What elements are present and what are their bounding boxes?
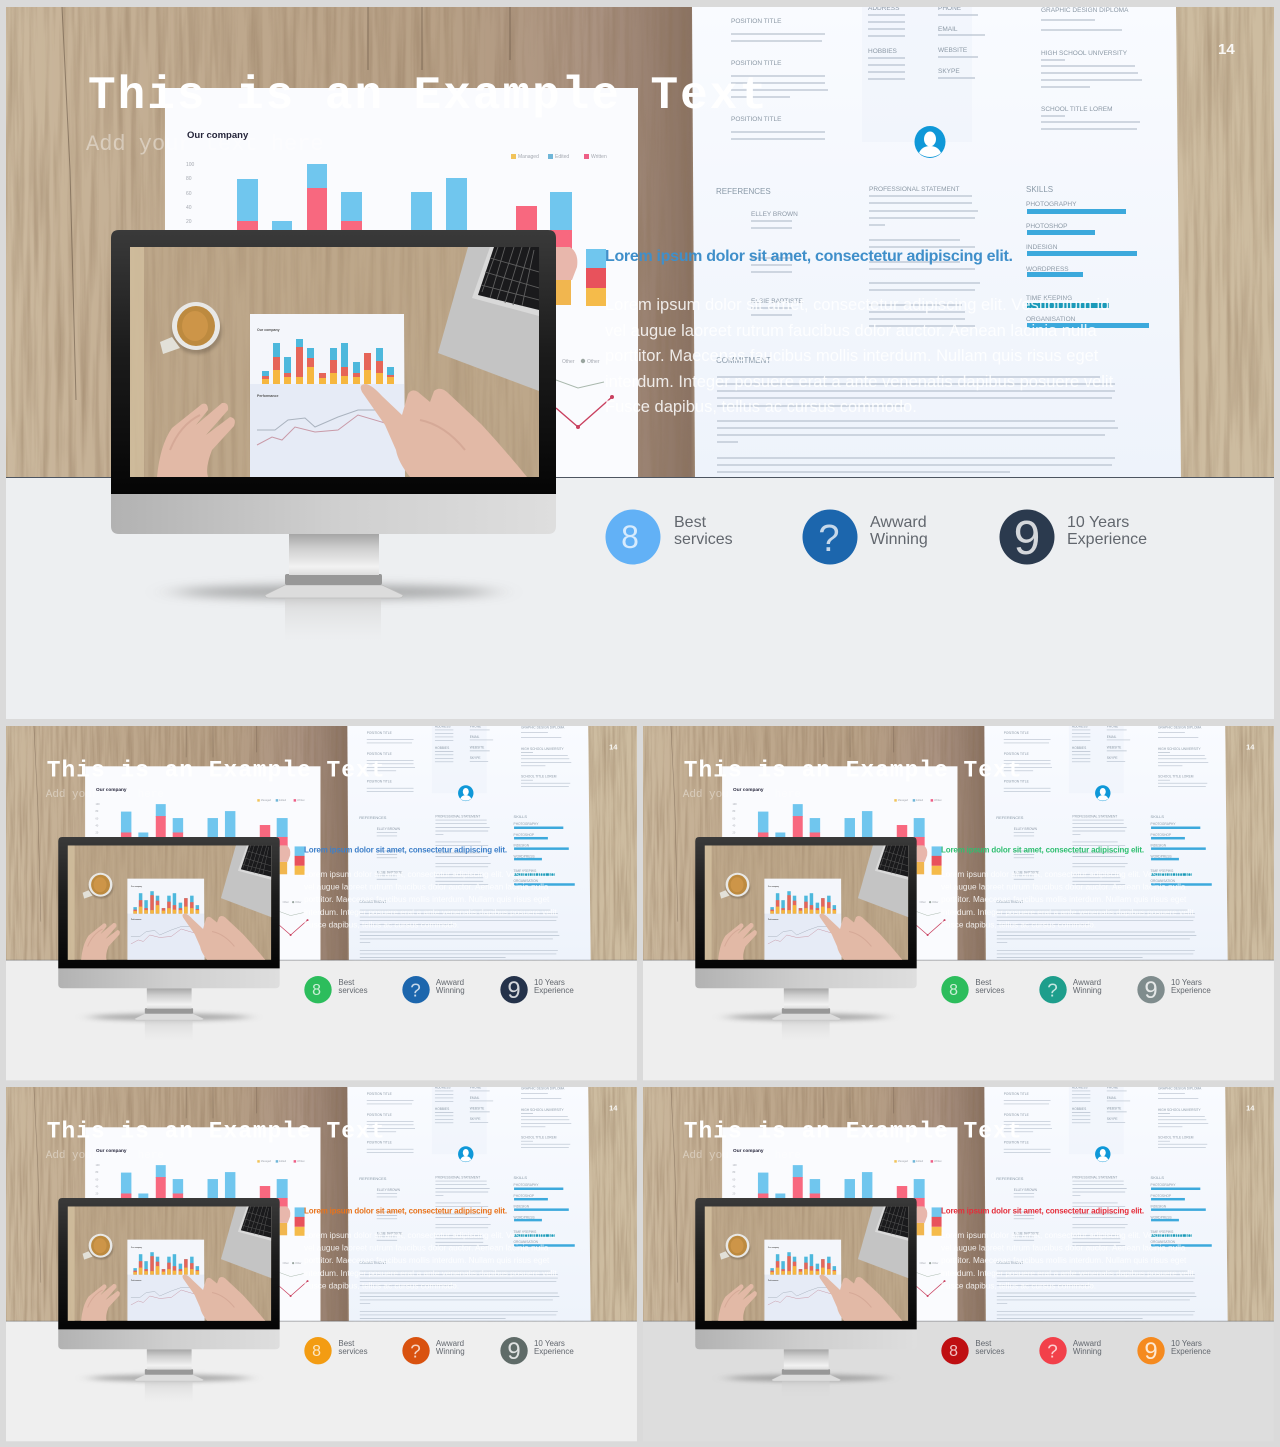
stat: best services: Best [975,1339,992,1348]
subtitle: Add your text here [683,1150,801,1162]
stat: award winning: Awward [1073,1339,1101,1348]
stat: award winning: Awward [1073,978,1101,987]
stat: award winning [402,1337,465,1364]
body text: Lorem ipsum dolor sit amet, consectetur adipiscing elit. Vestibulum id [605,296,1109,314]
body text: vel augue laoreet rutrum faucibus dolor auctor. Aenean lacinia nulla [304,1244,549,1253]
stat: award winning: Winning [436,986,465,995]
body text: Lorem ipsum dolor sit amet, consectetur adipiscing elit. Vestibulum id [304,870,555,879]
body text: porttitor. Maecenas faucibus mollis interdum. Nullam quis risus eget [304,895,550,904]
subtitle: Add your text here [46,1150,164,1162]
stat: award winning: Winning [1073,986,1102,995]
body text [941,870,1194,930]
photo and monitor artwork [643,724,1274,1041]
body text: Fusce dapibus, tellus ac cursus commodo. [941,1282,1096,1291]
stat: best services [606,510,733,564]
title: This is an Example Text [684,1118,1022,1144]
stat: award winning: Winning [1073,1347,1102,1356]
stat: best services: 8 [949,1343,958,1360]
body text: interdum. Integer posuere erat a ante venenatis dapibus posuere velit [941,908,1194,917]
stat: best services: Best [338,978,355,987]
heading: Lorem ipsum dolor sit amet, consectetur adipiscing elit. [941,845,1144,854]
stat: years of experience: Experience [534,986,574,995]
body text: porttitor. Maecenas faucibus mollis interdum. Nullam quis risus eget [941,1256,1187,1265]
body text: porttitor. Maecenas faucibus mollis interdum. Nullam quis risus eget [941,895,1187,904]
stat: award winning: ? [410,981,421,1002]
photo and monitor artwork [6,1085,637,1402]
subtitle: Add your text here [46,789,164,801]
stat: years of experience: 10 Years [534,978,565,987]
page number: 14 [609,1103,618,1112]
slide 2: green and blue variation [6,724,637,1080]
body text [605,296,1114,416]
heading: Lorem ipsum dolor sit amet, consectetur adipiscing elit. [605,248,1013,265]
body text: Fusce dapibus, tellus ac cursus commodo. [304,921,459,930]
stat: award winning [402,976,465,1003]
body text: Fusce dapibus, tellus ac cursus commodo. [941,921,1096,930]
stat: years of experience: Experience [1067,531,1147,548]
stat: award winning: Winning [870,531,928,548]
stat: years of experience: 10 Years [1067,514,1129,531]
subtitle: Add your text here [683,789,801,801]
bottom panel [6,726,637,1080]
stat: best services: services [338,1347,368,1356]
heading: Lorem ipsum dolor sit amet, consectetur adipiscing elit. [304,845,507,854]
stat: best services [304,1337,368,1364]
bottom panel [643,726,1274,1080]
title: This is an Example Text [88,70,769,122]
stat: years of experience [500,976,574,1004]
stat: best services: 8 [312,1343,321,1360]
body text: Lorem ipsum dolor sit amet, consectetur adipiscing elit. Vestibulum id [941,870,1192,879]
body text: interdum. Integer posuere erat a ante venenatis dapibus posuere velit [941,1269,1194,1278]
body text: Lorem ipsum dolor sit amet, consectetur adipiscing elit. Vestibulum id [941,1231,1192,1240]
title: This is an Example Text [47,757,385,783]
body text: interdum. Integer posuere erat a ante venenatis dapibus posuere velit [605,373,1114,391]
slide 3: green and teal variation [643,724,1274,1080]
stat: years of experience: 9 [1144,1338,1158,1365]
heading: Lorem ipsum dolor sit amet, consectetur adipiscing elit. [304,1206,507,1215]
body text: vel augue laoreet rutrum faucibus dolor auctor. Aenean lacinia nulla [941,883,1186,892]
stat: years of experience: Experience [1171,986,1211,995]
title: This is an Example Text [684,757,1022,783]
stat: award winning: ? [410,1342,421,1363]
stat: award winning: ? [1047,1342,1058,1363]
stat: best services: services [975,1347,1005,1356]
stat: award winning: Awward [436,978,464,987]
body text: vel augue laoreet rutrum faucibus dolor auctor. Aenean lacinia nulla [304,883,549,892]
stat: best services [941,1337,1005,1364]
stat: award winning [802,510,928,564]
body text: vel augue laoreet rutrum faucibus dolor auctor. Aenean lacinia nulla [605,322,1097,340]
stat: best services [304,976,368,1003]
page number: 14 [1246,1103,1255,1112]
bottom panel [6,7,1274,719]
stat: years of experience: 9 [1014,512,1040,565]
subtitle: Add your text here [86,132,324,157]
bottom panel [6,1087,637,1441]
body text: interdum. Integer posuere erat a ante venenatis dapibus posuere velit [304,1269,557,1278]
stat: award winning: Awward [436,1339,464,1348]
photo and monitor artwork [6,724,637,1041]
stat: years of experience: 10 Years [1171,1339,1202,1348]
stat: best services: 8 [312,982,321,999]
body text: vel augue laoreet rutrum faucibus dolor auctor. Aenean lacinia nulla [941,1244,1186,1253]
title: This is an Example Text [47,1118,385,1144]
stat: years of experience: 10 Years [1171,978,1202,987]
heading: Lorem ipsum dolor sit amet, consectetur adipiscing elit. [941,1206,1144,1215]
stat: award winning: Winning [436,1347,465,1356]
stat: years of experience: 9 [507,977,521,1004]
slide 4: orange variation [6,1085,637,1441]
stat: best services: services [338,986,368,995]
slide 5: red variation [643,1085,1274,1441]
body text: porttitor. Maecenas faucibus mollis interdum. Nullam quis risus eget [304,1256,550,1265]
stat: award winning [1039,1337,1102,1364]
stat: years of experience [1000,510,1147,565]
page number: 14 [609,742,618,751]
stat: best services [941,976,1005,1003]
stat: best services: Best [674,514,707,531]
body text [941,1231,1194,1291]
body text: Fusce dapibus, tellus ac cursus commodo. [304,1282,459,1291]
stat: years of experience: 10 Years [534,1339,565,1348]
bottom panel [643,1087,1274,1441]
stat: years of experience: 9 [1144,977,1158,1004]
stat: years of experience [1137,1337,1211,1365]
stat: award winning: ? [1047,981,1058,1002]
stat: award winning: Awward [870,514,927,531]
stat: years of experience: Experience [534,1347,574,1356]
stat: best services: Best [975,978,992,987]
body text: porttitor. Maecenas faucibus mollis interdum. Nullam quis risus eget [605,347,1099,365]
photo and monitor artwork [643,1085,1274,1402]
slide 1: large blue variation [6,5,1274,719]
page number: 14 [1246,742,1255,751]
stat: best services: services [674,531,733,548]
body text [304,870,557,930]
photo and monitor artwork [6,5,1274,641]
stat: best services: 8 [949,982,958,999]
stat: award winning [1039,976,1102,1003]
stat: best services: services [975,986,1005,995]
stat: award winning: ? [818,518,840,560]
body text: Fusce dapibus, tellus ac cursus commodo. [605,398,917,416]
body text: Lorem ipsum dolor sit amet, consectetur adipiscing elit. Vestibulum id [304,1231,555,1240]
stat: years of experience: Experience [1171,1347,1211,1356]
body text [304,1231,557,1291]
stat: best services: Best [338,1339,355,1348]
page number: 14 [1218,41,1235,58]
body text: interdum. Integer posuere erat a ante venenatis dapibus posuere velit [304,908,557,917]
stat: years of experience [500,1337,574,1365]
stat: years of experience: 9 [507,1338,521,1365]
stat: best services: 8 [621,519,639,555]
stat: years of experience [1137,976,1211,1004]
